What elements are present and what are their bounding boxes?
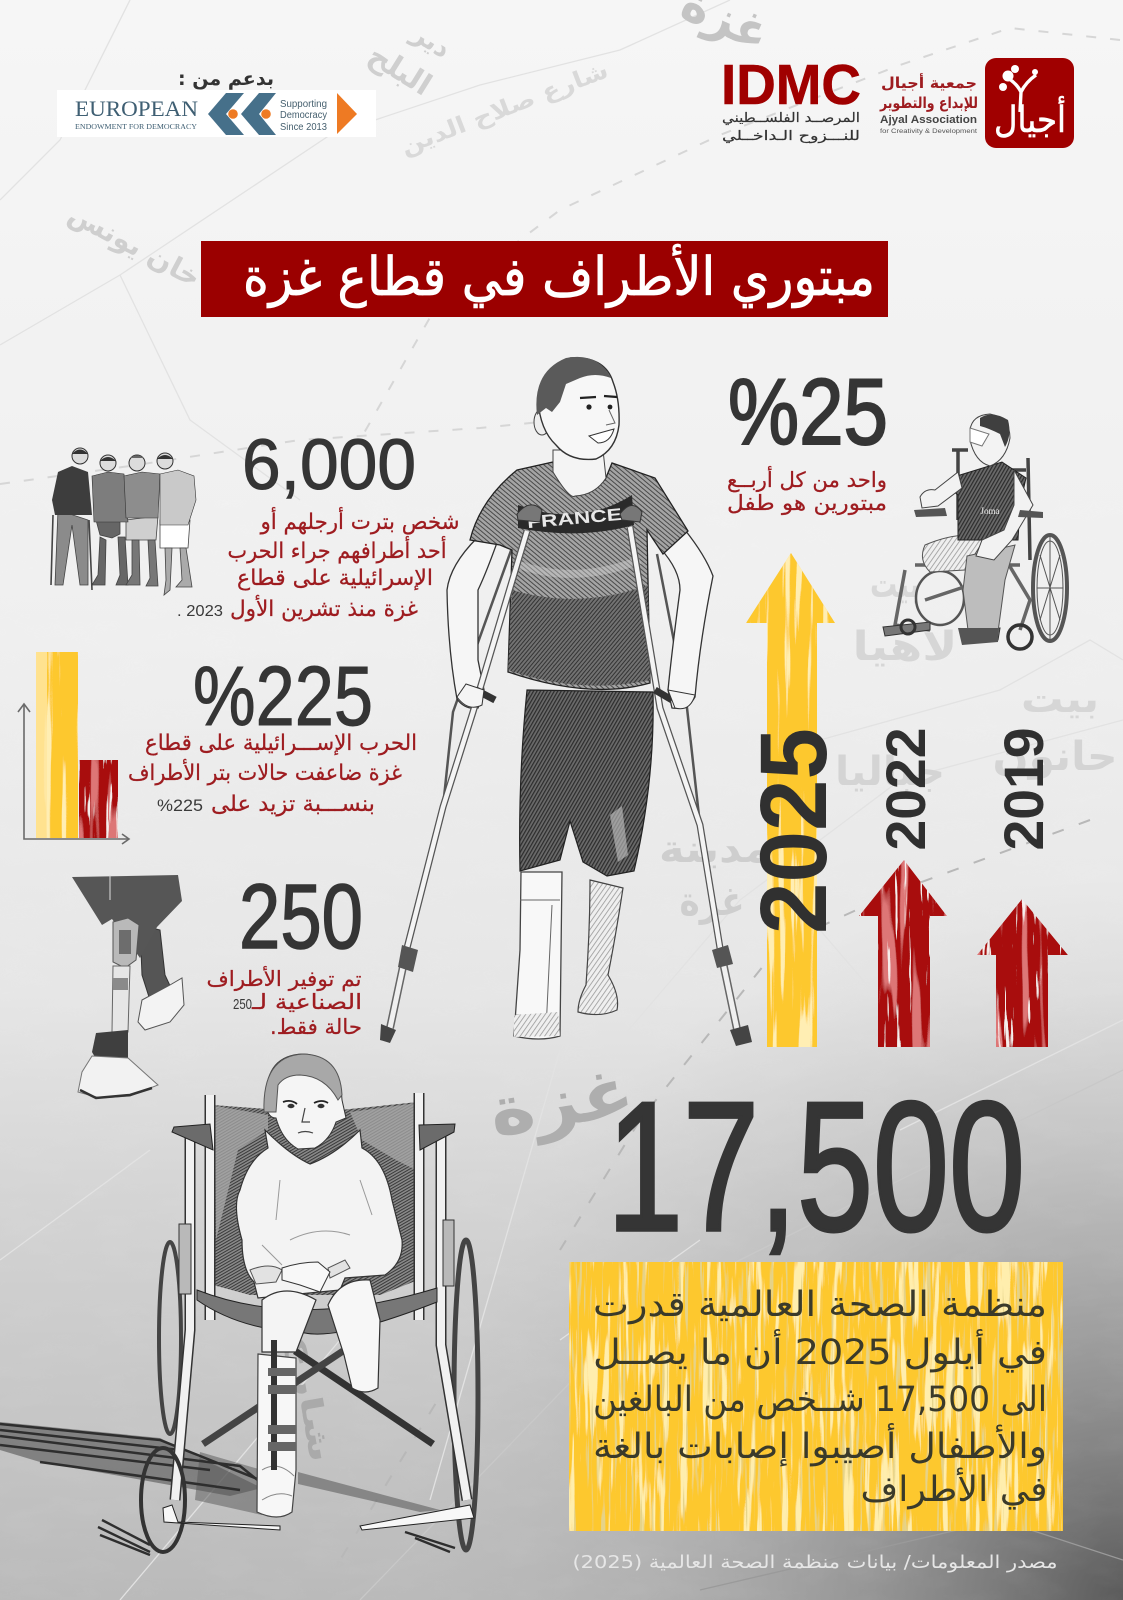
Ajyal name text: جمعية أجيال: [881, 73, 977, 92]
shirt: [470, 462, 688, 689]
seat: [197, 1288, 437, 1334]
caption: غزة منذ تشرين الأول: [230, 595, 418, 622]
callout text: [593, 1285, 1048, 1510]
shorts: [520, 690, 653, 876]
rear leg and shoe: [140, 925, 172, 1000]
arrow 2022: [859, 860, 947, 1047]
number 250: 250: [239, 866, 363, 968]
caption: الصناعية لـ: [251, 990, 362, 1014]
logo: European Endowment for Democracy: Democracy: [280, 110, 327, 121]
prosthetic knee and shin: [113, 918, 139, 968]
caption: بنســـبة تزيد على: [211, 792, 375, 817]
stat: 225%: [128, 649, 417, 817]
Ajyal red badge with tree: أجيال: [994, 96, 1066, 141]
hands: [457, 684, 695, 709]
caption: الحرب الإســـرائيلية على قطاع: [145, 731, 417, 756]
yellow bar: [36, 652, 78, 838]
caption: حالة فقط.: [270, 1015, 362, 1039]
background: faded map of Gaza: شارع صلاح الدين: [397, 58, 612, 161]
uprights and frame: [175, 1093, 467, 1500]
arms: [447, 505, 510, 708]
footrests: [163, 1505, 474, 1530]
callout text: منظمة الصحة العالمية قدرت: [593, 1285, 1047, 1325]
logo: European Endowment for Democracy: ENDOWMENT FOR DEMOCRACY: [75, 122, 198, 131]
year 2025: 2025: [741, 728, 847, 934]
illustration: boy in wheelchair: [883, 414, 1067, 649]
logo: IDMC: IDMC: [721, 53, 861, 117]
background: faded map of Gaza: دير: [405, 18, 456, 65]
left crutch: [380, 505, 542, 1043]
caption: [206, 966, 362, 1039]
Ajyal name text: for Creativity & Development: [880, 128, 977, 135]
logo: European Endowment for Democracy: Since 2013: [280, 122, 327, 133]
axes: [18, 704, 129, 844]
head: [970, 414, 1010, 466]
background: faded map of Gaza: خان يونس: [63, 197, 207, 294]
caster wheel: [141, 1448, 185, 1552]
caption: [727, 466, 887, 515]
year 2022: 2022: [874, 728, 937, 850]
caption: تم توفير الأطراف: [206, 966, 362, 992]
number 25%: %25: [728, 359, 888, 464]
red bar: [79, 760, 118, 838]
caption: الإسرائيلية على قطاع: [237, 566, 433, 591]
head: [264, 1054, 346, 1149]
background: faded map of Gaza: بيت: [1021, 677, 1099, 721]
logo: Ajyal Association: [879, 58, 1074, 148]
caption: 250: [233, 996, 252, 1013]
title banner: مبتوري الأطراف في قطاع غزة: [243, 244, 875, 308]
callout: WHO estimate: [569, 1262, 1063, 1531]
arrows by year: [741, 553, 1068, 1047]
callout text: في الأطراف: [860, 1467, 1048, 1510]
stump and leg: [922, 535, 985, 572]
big wheel: [1033, 535, 1067, 641]
illustration: boy in wheelchair: Joma: [980, 506, 1000, 516]
logo: IDMC: [721, 53, 861, 144]
caption: واحد من كل أربــع: [727, 466, 887, 492]
year 2019: 2019: [992, 728, 1055, 850]
background: faded map of Gaza: لاهيا: [852, 624, 958, 670]
stat: 250: [206, 866, 363, 1039]
caption: %225: [157, 796, 203, 815]
shoe: [92, 1030, 128, 1066]
logo: IDMC: للنـــزوح الـداخــلي: [722, 129, 860, 144]
armrests: [172, 1124, 455, 1150]
head: [534, 357, 619, 459]
callout text: الى 17,500 شــخص من البالغين: [593, 1380, 1047, 1420]
caption: غزة ضاعفت حالات بتر الأطراف: [128, 759, 402, 786]
logo: European Endowment for Democracy: Supporting: [280, 99, 327, 110]
seat back: [213, 1102, 418, 1295]
hoodie: [236, 1130, 402, 1298]
background: faded map of Gaza: مدينة: [659, 827, 771, 871]
caption: مبتورين هو طفل: [727, 491, 887, 515]
caption: أحد أطرافهم جراء الحرب: [228, 536, 446, 564]
background: faded map of Gaza: البلح: [362, 38, 438, 103]
cast leg: [514, 872, 562, 1039]
caption: [128, 731, 417, 817]
heading: with support from: بدعم من :: [178, 68, 274, 90]
caption: [177, 507, 460, 622]
background: faded map of Gaza: جباليا: [835, 749, 945, 795]
background: faded map of Gaza: شارع: [281, 1331, 338, 1465]
illustration: child in wheelchair: [0, 1054, 478, 1555]
stat: 25%: [727, 359, 888, 515]
shirt: [945, 462, 1026, 540]
caption: شخص بترت أرجلهم أو: [260, 507, 460, 535]
shirt: FRANCE: [526, 505, 623, 532]
right crutch: [620, 505, 752, 1046]
Ajyal name text: Ajyal Association: [880, 114, 977, 126]
bare leg and foot: [578, 880, 623, 1015]
rear wheels: [159, 1240, 478, 1550]
number 6,000: 6,000: [242, 426, 416, 505]
casted leg with external fixator: [257, 1291, 316, 1517]
arms: [920, 472, 962, 508]
caption: . 2023: [177, 603, 223, 620]
far crutch rails: [443, 545, 700, 825]
logo: IDMC: المرصــد الفلســطيني: [722, 111, 860, 126]
illustration: prosthetic leg: [72, 875, 184, 1098]
chart: amputation bars: [18, 652, 129, 844]
background: faded map of Gaza: غزة: [484, 1052, 639, 1153]
arrow 2025: [746, 553, 835, 1047]
background: faded map of Gaza: غزة: [680, 879, 744, 925]
logo: European Endowment for Democracy: EUROPEAN: [75, 96, 198, 121]
illustration: four amputees standing: [51, 448, 196, 595]
frame: [895, 560, 1030, 630]
neck: [553, 450, 606, 496]
logo: European Endowment for Democracy: [57, 90, 376, 137]
shorts: [72, 875, 182, 958]
callout text: في أيلول 2025 أن ما يصــل: [593, 1329, 1047, 1373]
background: faded map of Gaza: حانون: [992, 734, 1118, 780]
number 225%: %225: [193, 649, 373, 743]
Ajyal name text: للإبداع والتطوير: [879, 94, 978, 112]
ground shadow: [0, 1422, 455, 1555]
source note: مصدر المعلومات/ بيانات منظمة الصحة العالمية (2025): [573, 1552, 1058, 1573]
background: faded map of Gaza: بيت: [870, 562, 920, 606]
hands: [282, 1262, 330, 1292]
stump leg: [328, 1280, 380, 1392]
stat: 6,000: [177, 426, 460, 622]
arrow 2019: [977, 899, 1068, 1047]
Ajyal red badge with tree: [985, 58, 1074, 148]
callout text: والأطفال أصيبوا إصابات بالغة: [593, 1423, 1047, 1467]
Ajyal name text: [879, 73, 978, 135]
yellow panel: [569, 1262, 1063, 1531]
illustration: boy on crutches: [380, 357, 752, 1046]
